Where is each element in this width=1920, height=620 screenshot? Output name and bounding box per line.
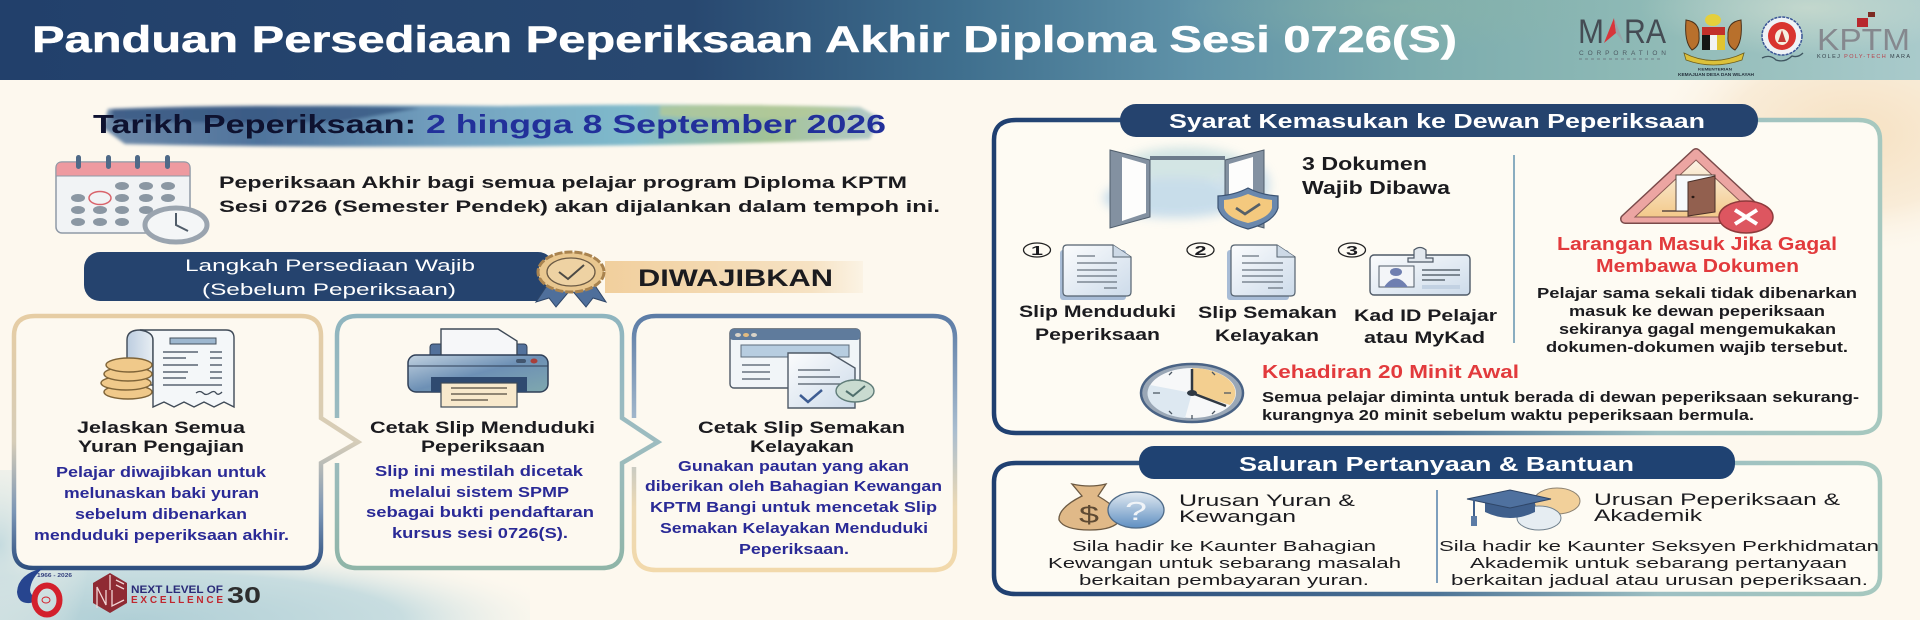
document 1: Peperiksaan (1035, 325, 1160, 344)
logo: Kementerian crest (1678, 14, 1754, 77)
logo: 60th anniversary: 1966 - 2026 (37, 573, 72, 579)
warning text: masuk ke dewan peperiksaan (1569, 304, 1825, 320)
step 1 heading (77, 418, 246, 456)
warning heading: Membawa Dokumen (1596, 256, 1799, 276)
document 2: Kelayakan (1215, 326, 1319, 345)
step 3 description: Semakan Kelayakan Menduduki (660, 520, 928, 537)
document 3: ID card: atau MyKad (1364, 328, 1485, 347)
intro paragraph (219, 173, 940, 216)
arrival notice: Semua pelajar diminta untuk berada di dewan peperiksaan sekurang- (1262, 390, 1859, 406)
step 1 description: menduduki peperiksaan akhir. (34, 527, 289, 544)
document 1: 1 (1031, 243, 1043, 258)
panel: enquiries and support (994, 446, 1880, 594)
date heading: Tarikh Peperiksaan: (93, 109, 416, 139)
fees heading: Urusan Yuran & (1179, 491, 1356, 510)
step 3 description: KPTM Bangi untuk mencetak Slip (650, 499, 937, 516)
document 2 (1187, 243, 1337, 345)
step 1 heading: Yuran Pengajian (78, 437, 244, 456)
watercolour wash: left edge (0, 470, 90, 620)
academic text: Akademik untuk sebarang pertanyaan (1470, 556, 1847, 572)
title: Panduan Persediaan Peperiksaan Akhir Diploma Sesi 0726(S) (32, 19, 1457, 60)
step 3 description (645, 458, 942, 558)
fees text (1048, 539, 1401, 589)
icon: graduation cap and speech bubbles (1467, 488, 1580, 530)
icon: money bag and question (1059, 484, 1164, 530)
heading pill (1139, 446, 1735, 479)
fees text: Sila hadir ke Kaunter Bahagian (1072, 539, 1376, 555)
academic heading (1594, 490, 1841, 525)
document 3: ID card: 3 (1346, 243, 1358, 258)
documents heading (1302, 154, 1451, 198)
icon: door with shield (1103, 147, 1278, 229)
warning text (1537, 286, 1857, 356)
logo: Next Level of Excellence 30: EXCELLENCE (131, 595, 223, 606)
DIWAJIBKAN highlight: DIWAJIBKAN (638, 265, 833, 292)
warning text: dokumen-dokumen wajib tersebut. (1546, 340, 1848, 356)
academic text: berkaitan jadual atau urusan peperiksaan. (1451, 573, 1868, 589)
step 2 description (366, 463, 594, 542)
step 1 description: sebelum dibenarkan (75, 506, 247, 523)
step 1 description: Pelajar diwajibkan untuk (56, 464, 267, 481)
icon: clock (1141, 364, 1243, 422)
icon: award badge (536, 252, 606, 307)
document 1 (1019, 243, 1176, 344)
exam date banner (93, 105, 886, 147)
documents heading: 3 Dokumen (1302, 154, 1427, 174)
panel: step 2 exam slip (337, 316, 658, 568)
logo: MARA Corporation: M (1578, 13, 1604, 51)
step 3 heading: Kelayakan (750, 437, 854, 456)
icon: printer (408, 329, 548, 407)
watercolour wash: top right (1620, 80, 1920, 260)
step 3 description: Peperiksaan. (739, 541, 849, 558)
brush stroke (103, 105, 880, 147)
intro paragraph: Peperiksaan Akhir bagi semua pelajar program Diploma KPTM (219, 173, 907, 192)
arrival notice: Kehadiran 20 Minit Awal (1262, 362, 1519, 382)
step 2 heading: Peperiksaan (421, 437, 545, 456)
academic text (1439, 539, 1879, 589)
document 1: Slip Menduduki (1019, 302, 1176, 321)
step 3 description: Gunakan pautan yang akan (678, 458, 909, 475)
step 2 heading (370, 418, 595, 456)
logo: MARA Corporation: RA (1624, 13, 1666, 51)
DIWAJIBKAN highlight (605, 261, 863, 293)
fees text: Kewangan untuk sebarang masalah (1048, 556, 1401, 572)
step 1 description (34, 464, 289, 544)
warning text: sekiranya gagal mengemukakan (1559, 322, 1836, 338)
header band (0, 0, 1920, 80)
logo: Kementerian crest: KEMAJUAN DESA DAN WILAYAH (1678, 72, 1754, 77)
logo: Next Level of Excellence 30: 30 (227, 582, 261, 608)
step 3 heading: Cetak Slip Semakan (698, 418, 905, 437)
banner: mandatory preparation steps: (Sebelum Peperiksaan) (202, 280, 456, 299)
icon: money bag and question: ? (1125, 496, 1147, 526)
icon: calendar with clock (56, 155, 207, 242)
academic text: Sila hadir ke Kaunter Seksyen Perkhidmatan (1439, 539, 1879, 555)
banner: mandatory preparation steps: Langkah Persediaan Wajib (185, 256, 475, 275)
watercolour wash: bottom left (0, 525, 530, 620)
panel: step 3 eligibility slip (634, 316, 955, 570)
logo: 60th anniversary (17, 568, 72, 614)
logo: KPTM: KPTM (1817, 22, 1910, 57)
logo: MARA Corporation (1578, 13, 1666, 59)
logo: MARA Corporation: CORPORATION (1579, 50, 1666, 57)
banner: mandatory preparation steps (84, 252, 554, 301)
arrival notice: kurangnya 20 minit sebelum waktu peperiksaan bermula. (1262, 408, 1754, 424)
icon: receipt and coins (101, 330, 234, 407)
date heading (93, 109, 886, 139)
step 1 description: melunaskan baki yuran (64, 485, 259, 502)
arrival notice (1262, 362, 1859, 424)
logo: Kementerian crest: KEMENTERIAN (1698, 66, 1732, 72)
step 3 heading (698, 418, 905, 456)
warning heading: Larangan Masuk Jika Gagal (1557, 234, 1837, 254)
logo: college emblem (1762, 17, 1803, 61)
step 2 description: sebagai bukti pendaftaran (366, 504, 594, 521)
heading pill: Saluran Pertanyaan & Bantuan (1239, 454, 1634, 476)
warning heading (1557, 234, 1837, 276)
step 1 heading: Jelaskan Semua (77, 418, 246, 437)
document 2: Slip Semakan (1198, 303, 1337, 322)
document 3: ID card: Kad ID Pelajar (1354, 306, 1497, 325)
document 2: 2 (1194, 243, 1206, 258)
documents heading: Wajib Dibawa (1302, 178, 1451, 198)
logo: Next Level of Excellence 30: NEXT LEVEL OF (131, 584, 223, 596)
warning text: Pelajar sama sekali tidak dibenarkan (1537, 286, 1857, 302)
logo group (1578, 12, 1910, 77)
step 2 description: melalui sistem SPMP (389, 484, 569, 501)
icon: no entry warning (1625, 153, 1773, 233)
icon: money bag and question: $ (1079, 502, 1099, 529)
academic heading: Urusan Peperiksaan & (1594, 490, 1841, 509)
academic heading: Akademik (1594, 506, 1703, 525)
step 2 heading: Cetak Slip Menduduki (370, 418, 595, 437)
document 3: ID card (1338, 243, 1497, 347)
step 2 description: Slip ini mestilah dicetak (375, 463, 584, 480)
icon: web page with document (730, 329, 874, 408)
heading pill (1120, 104, 1758, 137)
date heading: 2 hingga 8 September 2026 (426, 109, 886, 139)
logo: Next Level of Excellence 30 (93, 573, 261, 613)
fees text: berkaitan pembayaran yuran. (1079, 573, 1369, 589)
fees heading: Kewangan (1179, 507, 1296, 526)
panel: step 1 fees (14, 316, 358, 568)
heading pill: Syarat Kemasukan ke Dewan Peperiksaan (1169, 111, 1705, 133)
fees heading (1179, 491, 1356, 526)
logo: KPTM: KOLEJ POLY-TECH MARA (1817, 54, 1910, 60)
intro paragraph: Sesi 0726 (Semester Pendek) akan dijalankan dalam tempoh ini. (219, 197, 940, 216)
panel: exam hall entry requirements (994, 104, 1880, 433)
logo: KPTM (1817, 12, 1910, 60)
step 2 description: kursus sesi 0726(S). (392, 525, 568, 542)
step 3 description: diberikan oleh Bahagian Kewangan (645, 478, 942, 495)
